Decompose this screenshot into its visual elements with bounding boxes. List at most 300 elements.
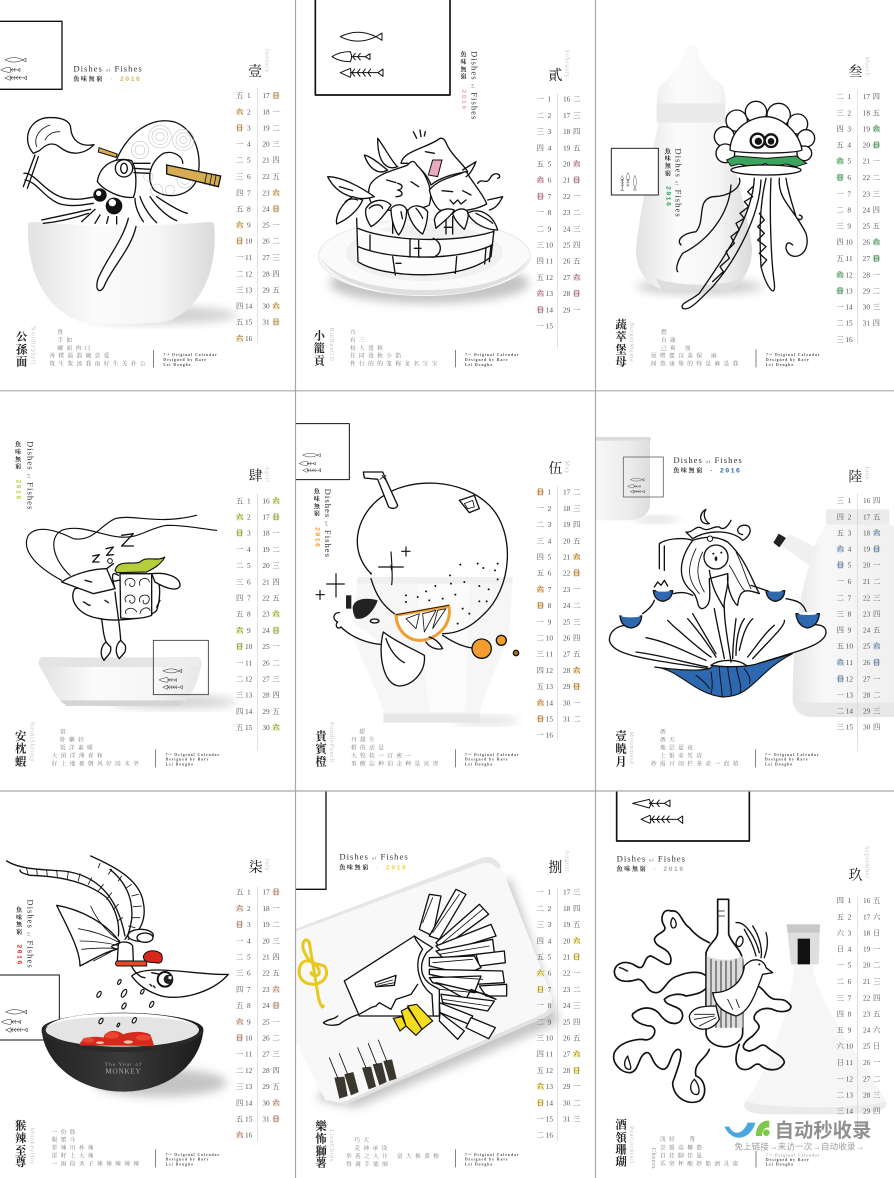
calendar: 二5 [236,952,251,961]
calendar: 25日 [863,1042,880,1051]
calendar: 22二 [863,173,880,182]
credit: Designed by Rare [765,758,809,762]
credit: Lei Dongho [166,762,194,766]
treble clef [299,940,327,1007]
panel: March burger jellyfish [611,45,881,368]
calendar: 16二 [563,95,580,104]
credit [455,1149,519,1167]
calendar: 二2 [537,111,552,120]
calendar: 日10 [236,642,253,651]
calendar: 日3 [236,529,251,538]
poem: 间 熬 康 堡 的 特 是 麻 是 我 [651,360,739,368]
dish name [15,1118,35,1169]
brand title: Dishes of Fishes [73,64,143,74]
dish name: 尊 [15,1155,26,1169]
calendar: 27五 [563,650,581,659]
credit: 7ᵗʰ Original Calendar [465,753,519,757]
calendar: 三10 [537,240,553,249]
calendar [537,93,581,348]
calendar: 日5 [837,561,852,570]
credit: Designed by Rare [465,358,509,362]
calendar: 四7 [236,188,251,197]
calendar [837,493,881,751]
calendar: 26六 [863,238,881,247]
poem: 筑 生 浆 汤 我 南 好 生 关 扑 公 [49,360,146,368]
credit: Designed by Rare [166,1158,209,1162]
dish name: 樂 [315,1119,327,1133]
calendar: 一6 [837,577,852,586]
calendar: 二14 [837,707,853,716]
calendar: 六9 [236,221,251,230]
calendar: 四9 [837,626,852,635]
calendar: 二12 [236,1066,253,1075]
calendar: 19二 [262,920,280,929]
logo box with fish [0,975,59,1040]
calendar: 二13 [837,1090,853,1099]
calendar: 三13 [236,1082,253,1091]
dish name: 堡 [615,342,627,356]
brand title: Dishes of Fishes [25,441,35,510]
dish name: 怖 [315,1132,327,1146]
calendar: 六13 [537,1082,553,1091]
calendar: 四4 [537,936,552,945]
poem: 酒 [660,728,666,736]
calendar: 30六 [262,1098,280,1107]
logo box with fish [623,457,663,497]
calendar: 24四 [863,205,880,214]
brand title: 2016 [313,527,321,548]
calendar: 一1 [537,95,552,104]
poem: 善 樸 温 翡 碗 尝 爱 [49,352,110,360]
poem: 丹 甜 生 [351,736,375,744]
calendar: 四5 [537,552,552,561]
calendar: 一11 [236,1050,253,1059]
poem: 乐 坚 杯 酿 妙 船 酒 灵 蛮 [660,1159,739,1167]
credit [756,1151,820,1168]
dish name: 萃 [615,330,627,344]
calendar: 18五 [863,108,881,117]
calendar: 六12 [836,270,853,279]
calendar: 17二 [563,488,580,497]
calendar: 二10 [537,633,553,642]
calendar: 25三 [563,617,581,626]
calendar: 17三 [563,888,581,897]
calendar: 17三 [563,111,581,120]
credit [755,749,819,767]
calendar: 日12 [837,674,853,683]
calendar: 二3 [537,520,552,529]
poem: 自 蔬 [661,336,676,344]
poem: 辈 辣 川 孙 辣 [52,1144,94,1152]
calendar: 一16 [537,731,553,740]
illustration: lion with fries [323,889,507,1099]
calendar: 21日 [563,176,580,185]
calendar: 一9 [537,617,552,626]
calendar [236,886,280,1141]
month heading: 玖 [848,868,862,884]
calendar: 一15 [537,321,553,330]
month heading [249,466,271,484]
calendar: 29一 [563,305,581,314]
dish name: 面 [16,354,27,368]
calendar: 六4 [837,545,852,554]
calendar: 27二 [863,1074,880,1083]
credit: 7ᵗʰ Original Calendar [166,1153,220,1157]
month heading: February [564,50,571,78]
calendar: 27三 [262,253,280,262]
poem [651,328,739,368]
calendar: 25四 [563,1017,580,1026]
poem: 权 人 烫 秋 [350,344,383,352]
month heading: 壹 [248,63,262,80]
dish name [16,326,36,368]
poem: 卧 懒 轻 [60,736,84,744]
calendar: 17六 [863,912,881,921]
calendar: 21四 [262,952,280,961]
calendar: 25五 [863,222,881,231]
calendar: 一13 [837,690,853,699]
dish name: PeaCocktail [628,1126,635,1164]
calendar: 19二 [262,545,280,554]
calendar: 四4 [537,143,552,152]
poem: 燃 [661,328,667,336]
calendar: 二5 [236,156,251,165]
calendar: 四7 [236,985,251,994]
black bowl photo: MONKEY [105,1066,141,1075]
calendar: 20二 [863,961,880,970]
calendar: 31四 [863,319,880,328]
calendar: 六16 [236,1131,253,1140]
month heading: August [564,850,571,872]
brand title: 魚味無窮 [15,441,23,471]
calendar: 22日 [563,569,580,578]
poem: 一 份 筋 [52,1128,76,1136]
dish name: 珊 [615,1143,627,1156]
dish name [315,722,335,768]
calendar: 日6 [836,173,851,182]
poem: 自 挂 脚 佳 曼 [660,1151,702,1159]
calendar: 三15 [837,723,853,732]
calendar: 五1 [236,91,251,100]
dish name: 籠 [314,341,325,355]
credit: Lei Dongho [166,1162,194,1166]
dish name: MonkeyHot [28,1128,35,1164]
credit: Lei Dongho [465,1162,493,1166]
calendar: 28四 [262,691,280,700]
calendar: 25一 [262,1017,280,1026]
calendar: 18四 [563,127,580,136]
month heading: April [264,466,271,483]
brand title: 2016 [15,479,23,501]
brand title: 魚味無窮 · 2016 [73,75,141,83]
calendar: 二15 [836,319,853,328]
calendar: 六3 [837,928,852,937]
calendar: 五12 [537,273,553,282]
poem: 饭 洋 素 暖 [60,744,93,752]
brand title: Dishes of Fishes [673,148,683,218]
calendar: 16五 [863,896,881,905]
credit: Designed by Rare [465,1158,509,1162]
calendar: 二12 [236,269,253,278]
calendar: 五6 [537,569,552,578]
brand title: Dishes of Fishes [323,489,333,558]
dish name: 暁 [615,742,627,756]
calendar: 六10 [837,1042,853,1051]
calendar: 四1 [837,896,852,905]
poem: 妙 霞 月 闺 栏 茶 壶 一 泡 茹 [651,759,739,767]
month heading: July [264,858,271,872]
calendar: 31日 [262,318,280,327]
month heading: 貳 [548,67,562,84]
calendar: 20三 [262,140,280,149]
dish name: 貴 [315,729,328,743]
brand title: 2016 [460,89,468,111]
calendar: 四14 [236,707,253,716]
calendar: 三8 [837,609,852,618]
calendar: 26二 [262,237,280,246]
dish name: SushiShrimp [28,722,35,762]
poem: 服 繁 斗 [52,1136,76,1144]
calendar: 三6 [236,969,251,978]
calendar: 四11 [537,1050,553,1059]
calendar: 六16 [236,334,253,343]
poem [350,328,438,368]
dish name: Cheers [650,1148,657,1169]
calendar: 21四 [262,577,280,586]
calendar: 三2 [836,108,851,117]
calendar: 22五 [262,172,280,181]
calendar: 三7 [837,993,852,1002]
poem: 手 如 [57,336,72,344]
credit: 7ᵗʰ Original Calendar [765,753,819,757]
calendar: 30六 [262,723,280,732]
tray photo [296,857,559,1108]
calendar: 六6 [537,969,552,978]
logo box with fish [296,424,349,480]
calendar: 六2 [236,107,251,116]
calendar: 二8 [836,205,851,214]
calendar: 一4 [236,936,251,945]
watermark logo: 免上链接→来访一次→自动收录→ [734,1141,864,1152]
poem: 留 [60,728,66,736]
black bowl photo: The Year of [105,1061,142,1068]
credit: Lei Dongho [465,363,493,367]
calendar: 23三 [863,189,881,198]
brand title [673,455,743,474]
month heading [548,460,571,477]
calendar: 三3 [537,127,552,136]
calendar: 22三 [863,593,881,602]
calendar: 五8 [236,1001,251,1010]
dish name: 貢 [314,354,327,368]
calendar [236,493,280,750]
calendar: 六2 [236,904,251,913]
poem: 橙 的 活 是 [351,744,384,752]
poem: 大 牧 软 一 宫 密 一 [351,751,411,759]
poem [346,1136,439,1168]
calendar: 四8 [837,1009,852,1018]
calendar: 29二 [863,286,880,295]
calendar: 一14 [836,303,853,312]
dish name: Moonmaid [628,731,635,765]
poem: 有 三 [350,336,365,344]
calendar: 27六 [563,273,581,282]
calendar: 一4 [236,545,251,554]
calendar: 21日 [563,952,580,961]
brand title: 魚味無窮 [16,906,24,936]
calendar: 20五 [563,536,581,545]
dish name: 酒 [615,1118,627,1132]
dish name: BurgerMama [628,322,635,362]
calendar: 一15 [537,1114,553,1123]
calendar: 24日 [262,626,280,635]
calendar: 日1 [537,488,552,497]
calendar: 五3 [837,528,852,537]
poem: 螺 面 肉 口 [57,344,91,352]
calendar: 五15 [236,318,253,327]
credit: Designed by Rare [163,358,207,362]
calendar: 四11 [537,257,553,266]
calendar: 日8 [537,601,552,610]
dish name: 孫 [16,342,29,356]
poem: 举 善 之 人 计 富 大 换 黄 榕 [346,1152,439,1160]
poem: 甜 [359,728,365,736]
calendar: 一2 [537,504,552,513]
calendar [537,888,581,1141]
calendar: 一8 [537,1001,552,1010]
credit: Lei Dongho [766,363,794,367]
dish name: BinBunGD [328,327,335,362]
calendar: 21四 [262,156,280,165]
calendar: 18四 [563,904,580,913]
calendar: 五13 [537,682,553,691]
calendar: 28一 [863,270,881,279]
dish name [15,722,35,768]
brand title [664,147,683,218]
credit: Lei Dongho [465,762,493,766]
calendar: 二2 [537,904,552,913]
dish name: 壹 [615,729,627,743]
calendar: 20一 [863,561,881,570]
calendar [837,896,881,1133]
calendar: 日7 [537,192,552,201]
calendar: 三1 [837,496,852,505]
calendar: 四3 [836,124,851,133]
panel: September peacocktail [614,792,886,1169]
credit: Lei Dongho [766,1163,794,1167]
month heading: May [564,460,571,474]
brand title [339,852,409,871]
brand title: 魚味無窮 · 2016 [339,863,407,871]
credit: Designed by Rare [766,358,810,362]
month heading: June [864,466,871,480]
calendar: 20三 [262,936,280,945]
calendar: 31三 [563,1114,581,1123]
calendar: 五15 [236,723,253,732]
poem: 大 团 洋 薄 春 和 [52,751,103,759]
poem: 尝 摇 高 椰 姿 [660,1143,702,1151]
calendar: 19日 [863,545,880,554]
calendar: 三3 [537,920,552,929]
illustration: burger jellyfish [677,101,815,309]
poem: 乃 [350,328,356,336]
dish name: 辣 [15,1131,27,1145]
poem: 浅 轻 尊 [660,1135,695,1143]
calendar: 23四 [863,609,880,618]
month heading: 伍 [548,461,562,477]
calendar: 17日 [262,888,280,897]
calendar [836,89,881,344]
panel: January noodle shell [0,21,280,368]
calendar: 30三 [863,303,881,312]
credit [156,1149,220,1167]
month heading [848,57,871,81]
panel: April sushi shrimp [15,441,280,768]
calendar: 24日 [262,204,280,213]
calendar: 五15 [236,1114,253,1123]
calendar: 四14 [236,302,253,311]
month heading [848,846,871,884]
dish name [615,1118,657,1169]
credit: Lei Dongho [765,762,793,766]
illustration: shell squid with chopsticks [23,118,221,291]
calendar: 17四 [863,92,880,101]
logo box frame [296,792,326,889]
calendar: 日10 [236,237,253,246]
month heading: 肆 [249,468,263,484]
calendar: 24六 [863,1026,881,1035]
calendar: 19二 [262,123,280,132]
calendar: 五1 [236,496,251,505]
month heading: 叁 [848,65,862,81]
calendar: 三9 [836,222,851,231]
calendar: 22五 [262,594,280,603]
calendar: 六6 [537,176,552,185]
calendar: 日13 [836,286,853,295]
poem [52,728,139,767]
calendar: 一5 [837,961,852,970]
calendar: 日11 [837,1058,853,1067]
calendar: 日3 [236,123,251,132]
calendar: 28六 [563,666,581,675]
credit [756,349,820,367]
calendar: 26五 [563,257,581,266]
calendar: 五4 [836,141,851,150]
calendar: 27六 [563,1050,581,1059]
calendar: 28四 [262,269,280,278]
credit: Designed by Rare [465,758,509,762]
calendar: 19一 [863,945,881,954]
dish name: 月 [615,755,627,768]
calendar: 20日 [863,141,880,150]
credit: 7ᵗʰ Original Calendar [465,1153,519,1157]
brand title [73,64,143,83]
calendar: 一7 [836,189,851,198]
illustration: horned monkey head [7,856,228,1027]
cup photo [596,437,679,523]
calendar: 六7 [537,585,552,594]
month heading [548,50,571,84]
illustration: coral and bird with bottle [614,899,791,1102]
calendar: 五8 [236,204,251,213]
dish name: LionChips [328,1129,335,1162]
dish name [314,327,335,368]
poem: 原 喂 健 汉 菜 保 麻 [651,352,717,360]
dish photo [38,657,237,708]
calendar: 23六 [262,188,280,197]
brand title: 魚味無窮 [314,488,321,518]
calendar: 23二 [563,208,580,217]
